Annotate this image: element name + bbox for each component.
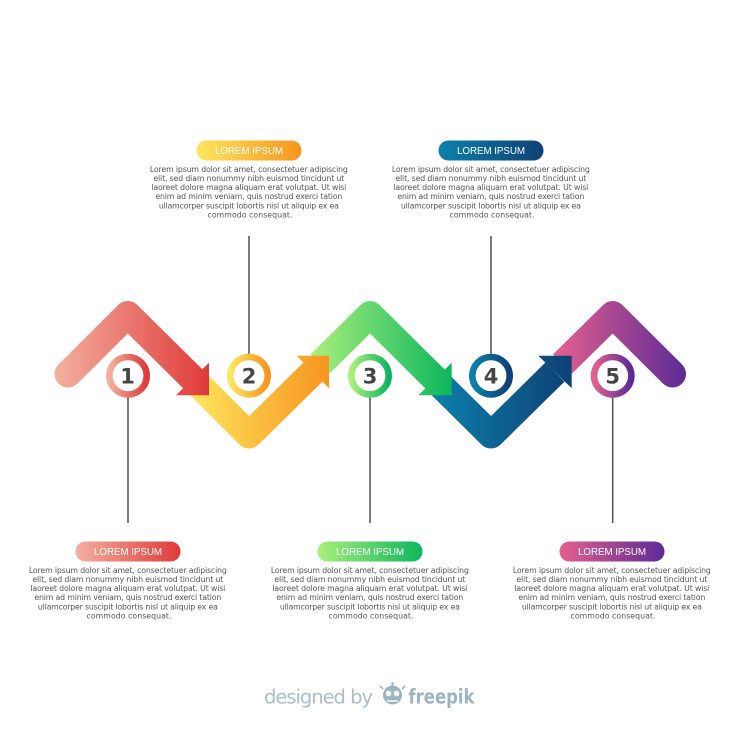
pill heading: LOREM IPSUM	[336, 547, 404, 558]
pill heading	[318, 542, 422, 562]
description text: laoreet dolore magna aliquam erat volutpat. Ut wisi	[514, 584, 709, 593]
step marker 4: 4	[484, 364, 498, 388]
description text: ullamcorper suscipit lobortis nisl ut aliquip ex ea	[38, 602, 218, 611]
pill heading: LOREM IPSUM	[457, 146, 525, 157]
description text: ullamcorper suscipit lobortis nisl ut aliquip ex ea	[401, 201, 581, 210]
connector line 4	[490, 236, 492, 355]
icon: freepik mascot	[380, 682, 405, 704]
description text: ullamcorper suscipit lobortis nisl ut aliquip ex ea	[522, 602, 702, 611]
description text: commodo consequat.	[570, 611, 656, 620]
step marker 4	[472, 357, 510, 394]
watermark text: freepik: freepik	[408, 684, 475, 708]
description text: commodo consequat.	[450, 210, 534, 219]
connector line 5	[612, 396, 614, 523]
description text: commodo consequat.	[208, 210, 292, 219]
description text: enim ad minim veniam, quis nostrud exerci tation	[276, 593, 463, 602]
description text: laoreet dolore magna aliquam erat volutpat. Ut wisi	[272, 584, 467, 593]
connector line 3	[369, 396, 371, 523]
pill heading	[76, 542, 180, 562]
pill heading: LOREM IPSUM	[578, 547, 646, 558]
description text: laoreet dolore magna aliquam erat volutpat. Ut wisi	[151, 183, 346, 192]
pill heading: LOREM IPSUM	[215, 146, 283, 157]
description text: elit, sed diam nonummy nibh euismod tincidunt ut	[274, 575, 465, 584]
step marker 5: 5	[605, 364, 620, 388]
description text: laoreet dolore magna aliquam erat volutpat. Ut wisi	[393, 183, 588, 192]
pill heading	[196, 140, 302, 160]
description text: enim ad minim veniam, quis nostrud exerci tation	[34, 593, 221, 602]
panel: step 4 label	[392, 140, 592, 219]
connector line 1	[127, 396, 129, 523]
arrow segment 1: red	[68, 314, 209, 395]
step marker 1: 1	[120, 364, 135, 388]
description text: Lorem ipsum dolor sit amet, consectetuer adipiscing	[271, 566, 469, 575]
description text: commodo consequat.	[328, 611, 414, 620]
step marker 1	[109, 357, 147, 394]
description text: elit, sed diam nonummy nibh euismod tincidunt ut	[516, 575, 707, 584]
description text: laoreet dolore magna aliquam erat volutpat. Ut wisi	[30, 584, 225, 593]
pill heading	[438, 140, 544, 160]
step marker 2: 2	[242, 364, 256, 388]
description text: enim ad minim veniam, quis nostrud exerci tation	[397, 192, 584, 201]
description text: enim ad minim veniam, quis nostrud exerci tation	[518, 593, 705, 602]
arrow segment 2: yellow	[200, 356, 329, 435]
panel: step 1 label	[29, 542, 229, 620]
panel: step 5 label	[513, 542, 713, 620]
description text: Lorem ipsum dolor sit amet, consectetuer adipiscing	[150, 165, 348, 174]
pill heading	[560, 542, 664, 562]
description text: enim ad minim veniam, quis nostrud exerci tation	[155, 192, 342, 201]
step marker 3: 3	[363, 364, 377, 388]
watermark text: designed by: designed by	[264, 686, 373, 708]
step marker 2	[230, 357, 268, 394]
description text: Lorem ipsum dolor sit amet, consectetuer adipiscing	[513, 566, 711, 575]
connector line 2	[248, 236, 250, 355]
description text: Lorem ipsum dolor sit amet, consectetuer adipiscing	[29, 566, 227, 575]
description text: ullamcorper suscipit lobortis nisl ut aliquip ex ea	[280, 602, 460, 611]
description text: ullamcorper suscipit lobortis nisl ut aliquip ex ea	[159, 201, 339, 210]
pill heading: LOREM IPSUM	[94, 547, 162, 558]
step marker 3	[351, 357, 389, 394]
panel: step 3 label	[271, 542, 471, 620]
description text: elit, sed diam nonummy nibh euismod tincidunt ut	[395, 174, 586, 183]
step marker 5	[594, 357, 631, 394]
description text: Lorem ipsum dolor sit amet, consectetuer adipiscing	[392, 165, 590, 174]
description text: commodo consequat.	[86, 611, 172, 620]
description text: elit, sed diam nonummy nibh euismod tincidunt ut	[153, 174, 344, 183]
arrow segment 5: purple	[562, 314, 686, 388]
panel: step 2 label	[150, 140, 350, 219]
arrow segment 3: green	[320, 314, 452, 395]
arrow segment 4: blue	[441, 356, 572, 435]
watermark: designed by freepik	[264, 682, 475, 708]
description text: elit, sed diam nonummy nibh euismod tincidunt ut	[32, 575, 223, 584]
